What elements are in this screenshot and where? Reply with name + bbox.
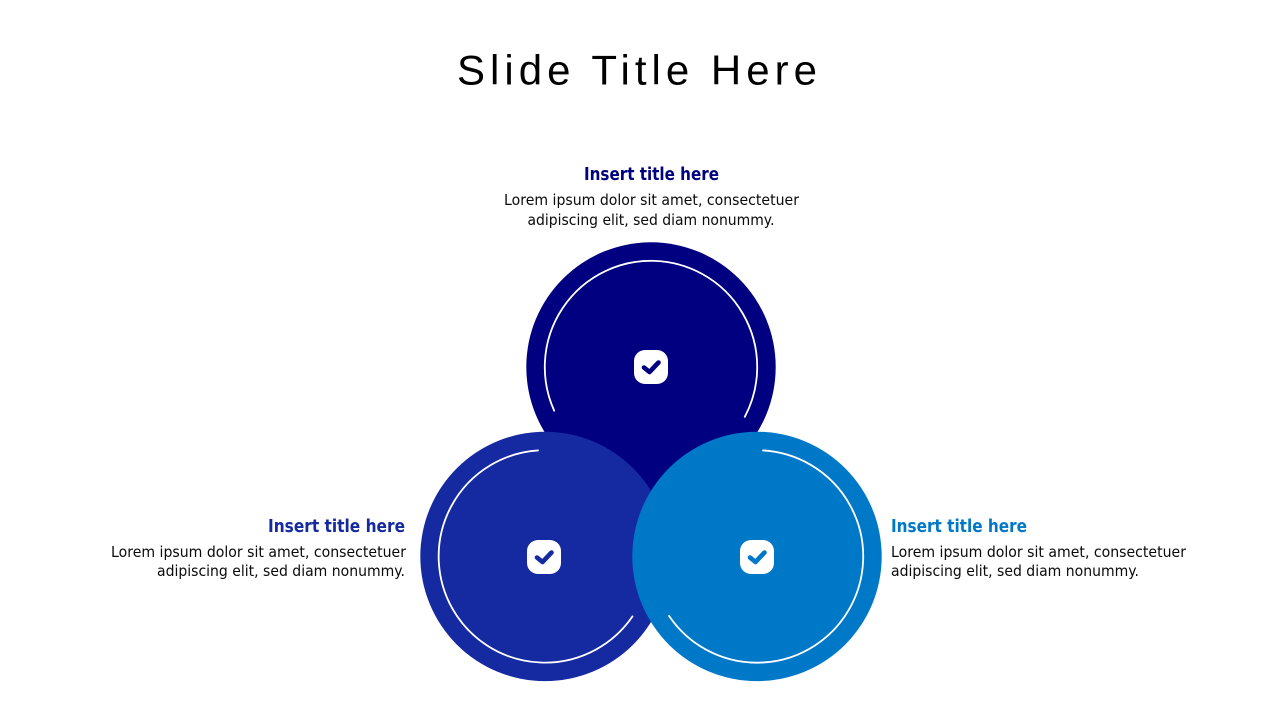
body: left: Lorem ipsum dolor sit amet, consectetuer	[111, 543, 407, 561]
body: right: adipiscing elit, sed diam nonummy.	[891, 562, 1139, 580]
body: top: adipiscing elit, sed diam nonummy.	[528, 211, 774, 229]
heading: right: Insert title here	[891, 517, 1027, 537]
text block: right	[891, 517, 1187, 580]
icon: right check badge	[740, 540, 774, 574]
panel: left circle	[420, 432, 670, 681]
icon: left check badge	[527, 540, 561, 574]
arc: top circle ring	[545, 261, 757, 417]
body: right: Lorem ipsum dolor sit amet, consectetuer	[891, 543, 1187, 561]
text block: top	[504, 165, 800, 229]
panel: right circle	[632, 432, 882, 681]
body: left: adipiscing elit, sed diam nonummy.	[157, 562, 405, 580]
arc: right circle ring	[669, 450, 863, 663]
icon: top check badge	[634, 350, 668, 384]
body: top	[504, 191, 800, 229]
heading: top: Insert title here	[584, 165, 719, 185]
heading: left: Insert title here	[268, 517, 405, 537]
title: Slide Title Here	[457, 46, 817, 94]
body: left	[111, 543, 407, 580]
panel: top circle	[526, 242, 776, 492]
arc: left circle ring	[439, 450, 632, 663]
text block: left	[111, 517, 407, 580]
body: right	[891, 543, 1187, 580]
body: top: Lorem ipsum dolor sit amet, consectetuer	[504, 191, 800, 209]
